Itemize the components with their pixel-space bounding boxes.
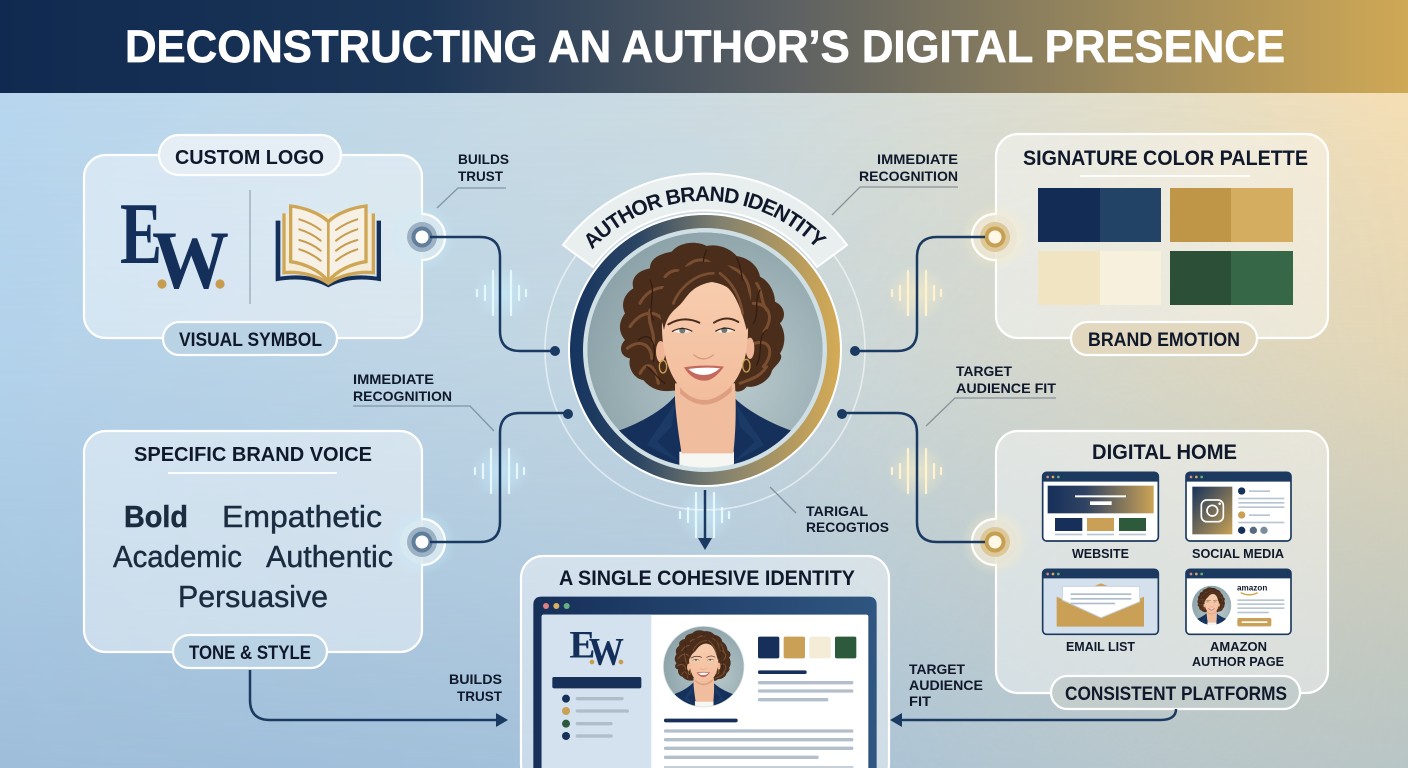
- pill: visual symbol: [163, 322, 337, 355]
- node: digital home: [961, 508, 1029, 576]
- node: palette: [961, 203, 1029, 271]
- brand voice words: Persuasive: [178, 579, 328, 614]
- banner: author brand identity: AUTHOR BRAND IDENTITY: [586, 186, 827, 250]
- annotation: target audience fit lower: [909, 661, 983, 709]
- annotation: builds trust: [437, 151, 509, 208]
- sidebar menu: [552, 677, 641, 740]
- thumbnail: amazon author page: [1186, 569, 1291, 634]
- annotation: immediate recognition right: IMMEDIATE: [877, 151, 958, 167]
- annotation: target audience fit upper: [926, 363, 1056, 426]
- pill: consistent platforms: [1051, 676, 1300, 709]
- title banner: DECONSTRUCTING AN AUTHOR’S DIGITAL PRESENCE: [125, 21, 1285, 72]
- central portrait: [544, 172, 866, 511]
- platform labels: WEBSITE: [1072, 546, 1129, 561]
- arrow: consistent platforms to cohesive identity: [890, 709, 1176, 727]
- pill: tone and style: TONE & STYLE: [189, 643, 311, 664]
- platform thumbnails: [1043, 472, 1291, 634]
- annotation: immediate recognition left: [353, 371, 494, 431]
- portrait illustration: [587, 232, 823, 472]
- banner: author brand identity: [562, 172, 848, 268]
- pill: consistent platforms: CONSISTENT PLATFORMS: [1065, 684, 1287, 705]
- pill: visual symbol: VISUAL SYMBOL: [179, 330, 322, 351]
- thumbnail: email list: [1043, 569, 1158, 634]
- panel: a single cohesive identity: [521, 556, 889, 768]
- annotation: tarigal recogtios: RECOGTIOS: [806, 519, 889, 535]
- arrow: tone and style to cohesive identity: [250, 670, 508, 727]
- content lines: [664, 670, 853, 768]
- small logo: W: [589, 629, 624, 673]
- annotation: target audience fit lower: TARGET: [909, 661, 965, 677]
- logo monogram: [120, 186, 229, 306]
- brand voice words: [113, 499, 393, 614]
- node: brand voice: [388, 508, 456, 576]
- connector: brand voice to portrait: [430, 413, 568, 542]
- panel: digital home: [996, 431, 1328, 709]
- heading: specific brand voice: SPECIFIC BRAND VOICE: [134, 443, 372, 466]
- annotation: tarigal recogtios: TARIGAL: [806, 503, 868, 519]
- annotation: target audience fit upper: TARGET: [956, 363, 1012, 379]
- arrow: portrait to cohesive identity: [698, 490, 712, 550]
- platform labels: SOCIAL MEDIA: [1192, 546, 1285, 561]
- panel: custom logo: [84, 135, 422, 355]
- annotation: builds trust: BUILDS: [458, 151, 509, 167]
- heading: signature color palette: SIGNATURE COLOR PALETTE: [1023, 147, 1308, 170]
- annotation: target audience fit lower: FIT: [909, 693, 931, 709]
- connector: custom logo to portrait: [430, 237, 555, 351]
- thumbnail: social media: [1186, 472, 1291, 541]
- swatches: [1038, 188, 1293, 305]
- annotation: immediate recognition left: IMMEDIATE: [353, 371, 434, 387]
- pill: brand emotion: [1071, 322, 1257, 355]
- annotation: immediate recognition left: RECOGNITION: [353, 388, 452, 404]
- platform labels: EMAIL LIST: [1066, 639, 1135, 654]
- annotation: immediate recognition right: [832, 151, 958, 215]
- pill: tone and style: [173, 635, 327, 668]
- small logo: E: [569, 624, 595, 666]
- small logo: [569, 624, 624, 673]
- brand voice words: Academic: [113, 539, 242, 574]
- platform labels: [1066, 546, 1285, 669]
- signal waves: [470, 265, 947, 543]
- connector: palette to portrait: [855, 237, 985, 351]
- heading pill: custom logo: CUSTOM LOGO: [175, 146, 324, 169]
- panel: signature color palette: [996, 134, 1328, 355]
- panel: specific brand voice: [84, 431, 422, 668]
- title banner: [0, 0, 1408, 93]
- annotation: target audience fit upper: AUDIENCE FIT: [956, 380, 1056, 396]
- thumbnail: website: [1043, 472, 1158, 541]
- annotation: builds trust lower: BUILDS: [449, 671, 502, 687]
- annotation: tarigal recogtios: [770, 487, 889, 535]
- connector: digital home to portrait: [842, 413, 985, 542]
- annotation: builds trust: TRUST: [458, 168, 503, 184]
- small palette: [758, 637, 856, 658]
- platform labels: AMAZON: [1210, 639, 1267, 654]
- brand voice words: Bold: [124, 499, 188, 534]
- heading: digital home: DIGITAL HOME: [1092, 441, 1237, 464]
- browser mockup: [533, 597, 877, 768]
- brand voice words: Empathetic: [222, 499, 382, 534]
- annotation: target audience fit lower: AUDIENCE: [909, 677, 983, 693]
- avatar: [663, 626, 744, 708]
- heading pill: custom logo: [159, 135, 341, 175]
- thumbnail: amazon author page: amazon: [1237, 583, 1267, 592]
- annotation: builds trust lower: TRUST: [457, 688, 502, 704]
- connector dots: [550, 346, 860, 419]
- logo monogram: W: [152, 214, 229, 306]
- heading: a single cohesive identity: A SINGLE COHESIVE IDENTITY: [559, 566, 855, 590]
- platform labels: AUTHOR PAGE: [1192, 654, 1284, 669]
- pill: brand emotion: BRAND EMOTION: [1088, 330, 1240, 351]
- annotation: builds trust lower: [449, 671, 502, 704]
- brand voice words: Authentic: [266, 539, 393, 574]
- node: custom logo: [388, 203, 456, 271]
- icon: open book: [276, 206, 381, 287]
- annotation: immediate recognition right: RECOGNITION: [859, 168, 958, 184]
- logo monogram: E: [120, 186, 162, 283]
